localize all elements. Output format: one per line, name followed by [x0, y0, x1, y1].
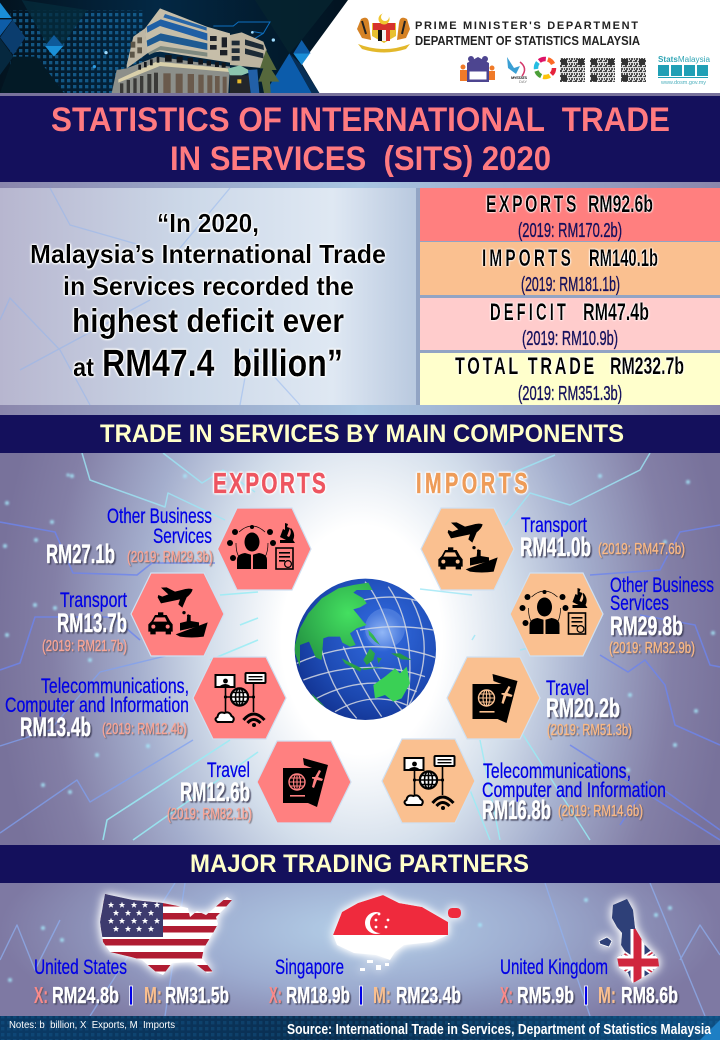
hexagon icon: transport — [131, 573, 224, 656]
panel: deficit: RM47.4b — [583, 299, 649, 326]
heading: exports: EXPORTS — [213, 468, 328, 500]
exports: transport: (2019: RM21.7b) — [42, 638, 127, 655]
panel: deficit: (2019: RM10.9b) — [522, 328, 618, 350]
panel: deficit: DEFICIT — [490, 299, 569, 326]
heading: main components — [0, 415, 720, 453]
exports: other business services: Other Business — [107, 505, 212, 528]
panel: total trade — [420, 353, 720, 405]
exports: travel: Travel — [207, 759, 250, 782]
globe — [295, 579, 436, 720]
hexagon icon: travel — [447, 657, 540, 739]
partner: United States: X: — [34, 982, 48, 1008]
exports: other business services: Services — [153, 525, 212, 548]
hexagon icon: travel — [257, 741, 351, 823]
hexagon icon: telecom — [193, 657, 286, 739]
imports: transport — [421, 508, 685, 590]
imports: transport: Transport — [521, 514, 587, 537]
imports: telecommunications: Telecommunications, — [483, 760, 631, 783]
partner: United Kingdom: M: — [598, 982, 616, 1008]
partner: United Kingdom — [500, 895, 678, 1008]
exports: other business services: RM27.1b — [46, 539, 115, 569]
quote panel: Malaysia’s International Trade — [30, 239, 386, 269]
partner: United Kingdom: X: — [500, 982, 513, 1008]
panel: deficit — [420, 298, 720, 350]
exports: telecommunications — [5, 657, 286, 742]
partner: United States: M: — [144, 982, 162, 1008]
imports: other business services: Services — [610, 592, 669, 615]
imports: telecommunications: (2019: RM14.6b) — [558, 803, 643, 820]
StatsMalaysia social block: StatsMalaysia — [658, 55, 711, 64]
heading: major trading partners — [0, 845, 720, 883]
partner: United Kingdom: RM5.9b — [517, 982, 574, 1008]
partner: Singapore: Singapore — [275, 956, 344, 979]
partner: Singapore: RM18.9b — [286, 982, 350, 1008]
imports: other business services — [510, 573, 714, 657]
exports: telecommunications: Computer and Information — [5, 694, 189, 717]
panel: imports total: IMPORTS — [482, 245, 574, 272]
icon: SDG wheel — [536, 59, 554, 77]
department names — [415, 20, 641, 48]
imports: telecommunications — [382, 739, 666, 825]
hexagon icon: transport — [421, 508, 514, 590]
exports: other business services: (2019: RM29.3b) — [127, 549, 213, 566]
partner: Singapore: X: — [269, 982, 282, 1008]
partner: United States — [34, 888, 240, 1008]
partner: United Kingdom: RM8.6b — [621, 982, 678, 1008]
partner: Singapore — [269, 890, 461, 1008]
exports: other business services — [46, 505, 311, 590]
title band: IN SERVICES (SITS) 2020 — [170, 140, 551, 178]
quote panel: “In 2020, — [157, 208, 259, 238]
imports: travel: RM20.2b — [546, 693, 620, 723]
panel: total trade: (2019: RM351.3b) — [518, 383, 622, 405]
quote panel: highest deficit ever — [72, 302, 344, 339]
panel: total trade: RM232.7b — [610, 353, 684, 380]
title band: STATISTICS OF INTERNATIONAL TRADE — [51, 101, 670, 139]
title band — [0, 96, 720, 182]
imports: telecommunications: Computer and Information — [482, 779, 666, 802]
footer: Notes: b billion, X Exports, M Imports — [9, 1019, 175, 1031]
footer — [0, 1016, 720, 1040]
panel: exports total: RM92.6b — [588, 191, 653, 218]
imports: transport: (2019: RM47.6b) — [598, 541, 685, 558]
hexagon icon: telecom — [382, 739, 475, 823]
exports: travel: RM12.6b — [180, 777, 250, 807]
exports: travel: (2019: RM82.1b) — [167, 806, 252, 823]
imports: travel — [447, 657, 632, 739]
imports: travel: (2019: RM51.3b) — [547, 722, 632, 739]
header banner — [0, 0, 720, 93]
partner: United States: United States — [34, 956, 127, 979]
imports: transport: RM41.0b — [520, 532, 591, 562]
panel: total trade: TOTAL TRADE — [455, 353, 597, 380]
exports: telecommunications: Telecommunications, — [41, 675, 189, 698]
quote panel — [0, 188, 416, 405]
panel: imports total: RM140.1b — [589, 245, 658, 272]
exports: transport: RM13.7b — [57, 608, 127, 638]
icon: Malaysian coat of arms — [357, 13, 410, 52]
hexagon icon: business — [510, 573, 603, 656]
StatsMalaysia social block: www.dosm.gov.my — [660, 80, 706, 86]
panel: exports total — [420, 188, 720, 242]
panel: imports total — [420, 242, 720, 296]
partner: United States: RM24.8b — [52, 982, 119, 1008]
campaign logos — [460, 56, 554, 84]
campaign logos: DAY — [519, 79, 527, 84]
partner: Singapore: RM23.4b — [396, 982, 461, 1008]
quote panel: in Services recorded the — [63, 271, 354, 301]
StatsMalaysia social block — [658, 55, 711, 86]
department names: PRIME MINISTER'S DEPARTMENT — [415, 20, 638, 32]
exports: transport — [42, 573, 224, 656]
panel: imports total: (2019: RM181.1b) — [521, 274, 620, 296]
map: UK flag — [599, 895, 662, 987]
exports: telecommunications: RM13.4b — [20, 712, 91, 742]
panel: exports total: EXPORTS — [486, 191, 579, 218]
QR codes — [560, 58, 646, 82]
exports: transport: Transport — [60, 589, 127, 612]
map: Singapore flag — [330, 890, 461, 971]
quote panel: at — [73, 352, 94, 382]
imports: other business services: RM29.8b — [610, 611, 683, 641]
heading: imports: IMPORTS — [416, 468, 531, 500]
quote panel: RM47.4 billion” — [102, 343, 343, 385]
building — [112, 8, 279, 93]
campaign logos: MYSTATS — [511, 75, 527, 80]
dark tech banner with building — [0, 0, 348, 93]
imports: telecommunications: RM16.8b — [482, 795, 551, 825]
partner: United Kingdom: United Kingdom — [500, 956, 608, 979]
partner: Singapore: M: — [373, 982, 391, 1008]
panel: exports total: (2019: RM170.2b) — [518, 220, 622, 242]
heading: main components: TRADE IN SERVICES BY MAIN COMPONENTS — [100, 420, 624, 448]
map: US flag — [95, 888, 240, 978]
exports: telecommunications: (2019: RM12.4b) — [102, 721, 187, 738]
heading: major trading partners: MAJOR TRADING PARTNERS — [190, 850, 529, 878]
department names: DEPARTMENT OF STATISTICS MALAYSIA — [415, 33, 641, 48]
imports: travel: Travel — [546, 677, 589, 700]
hexagon icon: business — [218, 508, 311, 590]
exports: travel — [167, 741, 351, 823]
partner: United States: RM31.5b — [165, 982, 229, 1008]
